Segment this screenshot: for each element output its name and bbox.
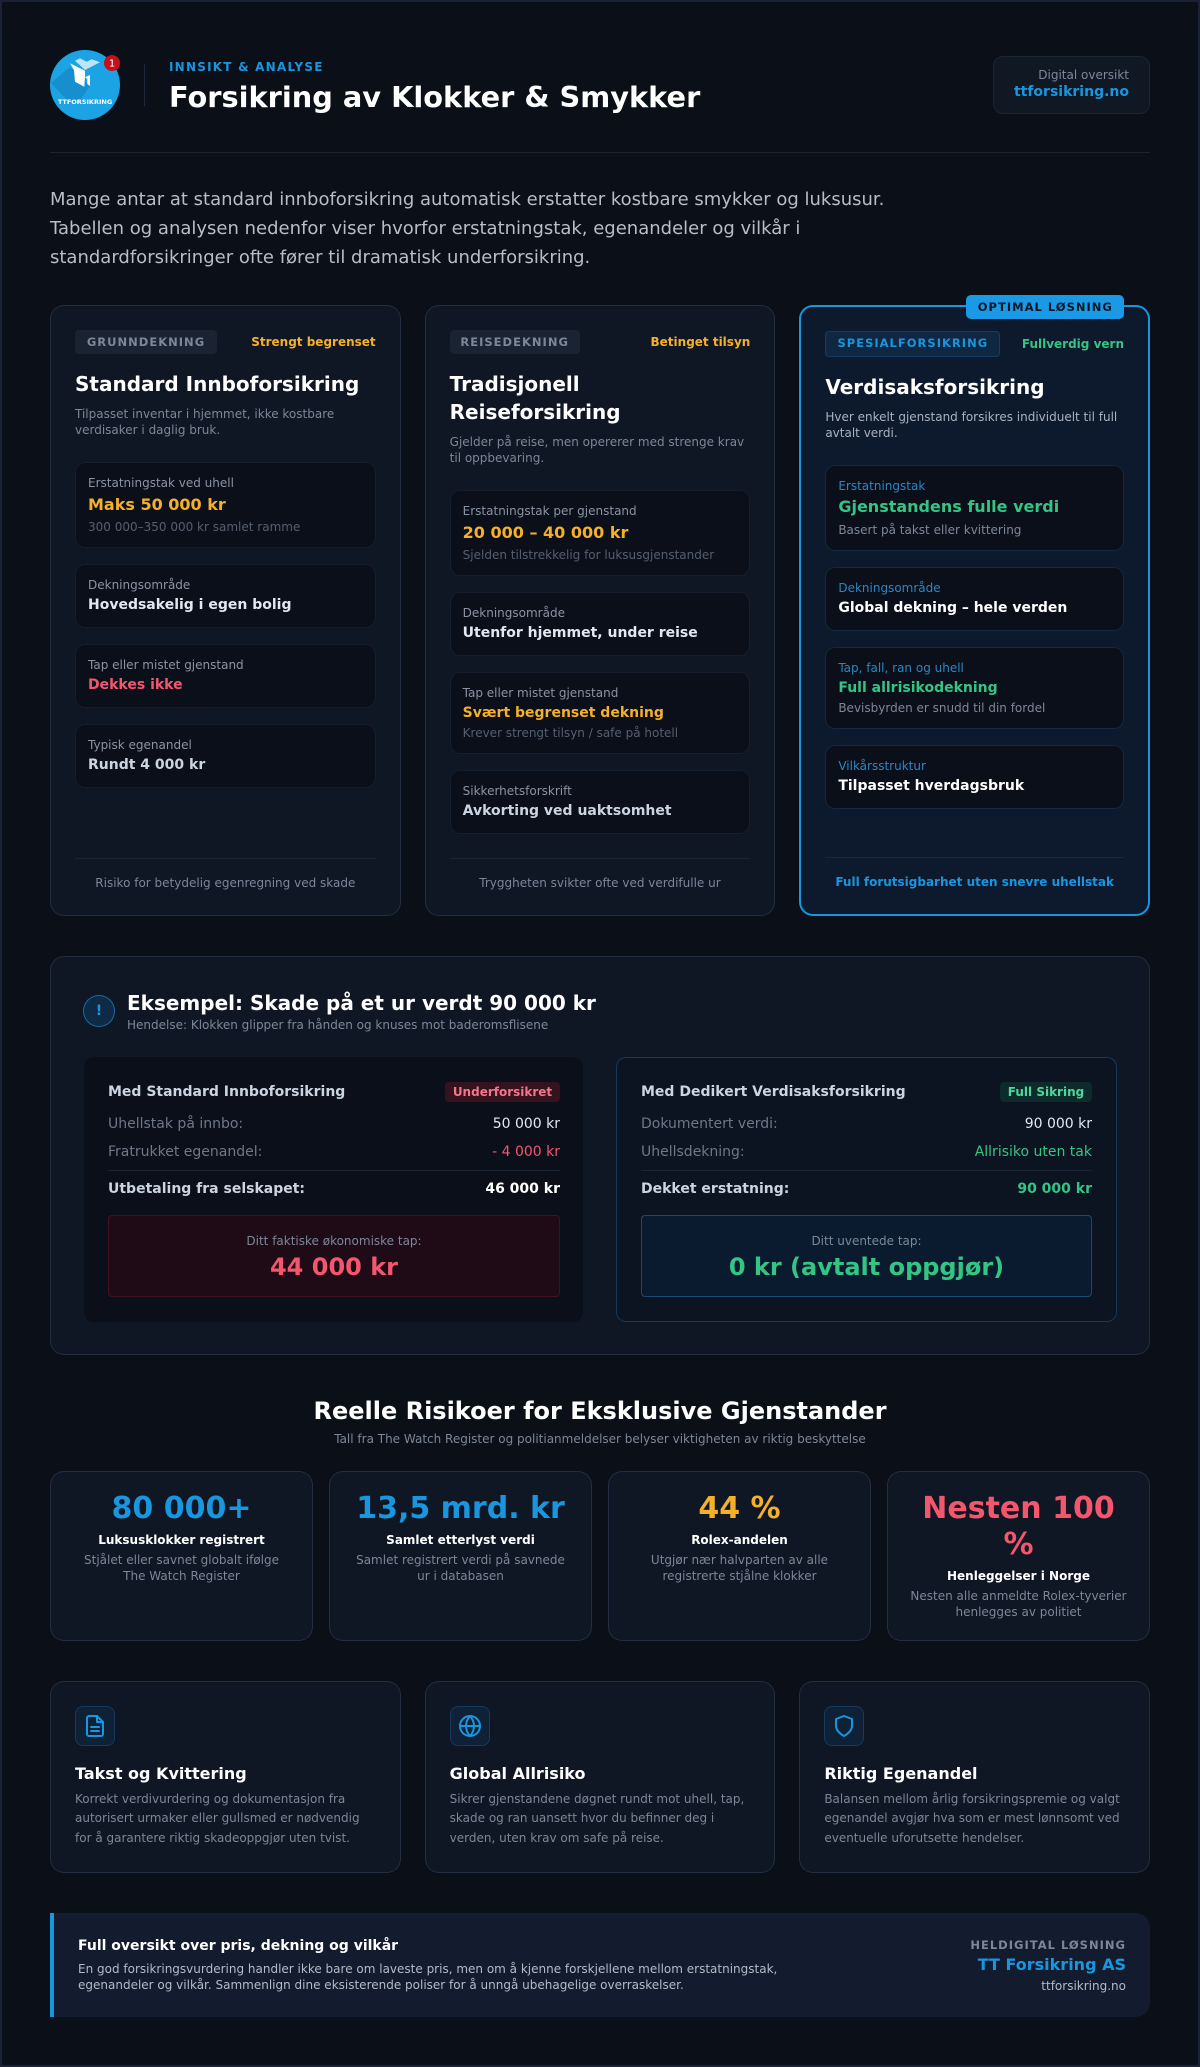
panel: takst og kvittering: Korrekt verdivurdering og dokumentasjon fra: [75, 1792, 345, 1806]
stat: 80 000+: [50, 1471, 313, 1641]
panel: tradisjonell reiseforsikring: Krever strengt tilsyn / safe på hotell: [463, 726, 678, 740]
panel: verdisak calculation: 90 000 kr: [1025, 1116, 1092, 1132]
panel: verdisaksforsikring: Global dekning – hele verden: [838, 600, 1067, 616]
heading: reelle risikoer: Reelle Risikoer for Eksklusive Gjenstander: [313, 1397, 887, 1425]
panel: standard innboforsikring: Tap eller mistet gjenstand: [88, 658, 244, 672]
title: Forsikring av Klokker & Smykker: [169, 80, 700, 114]
panel: standard innboforsikring: 300 000–350 000 kr samlet ramme: [88, 520, 300, 534]
stat: 80 000+: 80 000+: [112, 1491, 251, 1526]
website box: Digital oversikt: [1038, 68, 1129, 82]
callout: loss: [108, 1215, 560, 1297]
panel: standard innboforsikring: Tilpasset inventar i hjemmet, ikke kostbare: [75, 407, 334, 421]
stat: 13,5 mrd: Samlet etterlyst verdi: [386, 1533, 535, 1547]
panel: verdisaksforsikring: Verdisaksforsikring: [825, 375, 1045, 399]
icon: notification badge: 1: [109, 58, 115, 70]
panel: standard innboforsikring: Strengt begrenset: [251, 335, 376, 349]
heading: Eksempel: Skade på et ur verdt 90 000 kr: [127, 991, 596, 1015]
panel: tradisjonell reiseforsikring: Betinget tilsyn: [651, 335, 750, 349]
panel: verdisak calculation: Med Dedikert Verdisaksforsikring: [641, 1084, 906, 1100]
panel: global allrisiko: [425, 1681, 775, 1873]
panel: verdisaksforsikring: Basert på takst eller kvittering: [838, 523, 1021, 537]
stat: 13,5 mrd: Samlet registrert verdi på savnede: [356, 1553, 565, 1567]
panel: verdisak calculation: Uhellsdekning:: [641, 1144, 745, 1160]
callout: no loss: 0 kr (avtalt oppgjør): [729, 1253, 1004, 1281]
panel: global allrisiko: verden, uten krav om safe på reise.: [450, 1830, 664, 1844]
intro text: standardforsikringer ofte fører til dramatisk underforsikring.: [50, 247, 590, 268]
stat: 44 %: Utgjør nær halvparten av alle: [651, 1553, 828, 1567]
panel: riktig egenandel: eventuelle uforutsette hendelser.: [824, 1830, 1024, 1844]
panel: verdisaksforsikring: Hver enkelt gjenstand forsikres individuelt til full: [825, 410, 1117, 424]
panel: tradisjonell reiseforsikring: REISEDEKNING: [460, 335, 569, 349]
stat: 13,5 mrd: [329, 1471, 592, 1641]
website box: [993, 56, 1150, 114]
panel: standard calculation: - 4 000 kr: [492, 1144, 560, 1160]
callout: no loss: [641, 1215, 1092, 1297]
header: [50, 50, 1150, 153]
panel: verdisaksforsikring: Full allrisikodekning: [838, 680, 998, 696]
panel: global allrisiko: Sikrer gjenstandene døgnet rundt mot uhell, tap,: [450, 1792, 744, 1806]
panel: verdisaksforsikring: Fullverdig vern: [1022, 337, 1124, 351]
panel: tradisjonell reiseforsikring: Avkorting ved uaktsomhet: [463, 803, 672, 819]
panel: standard innboforsikring: Maks 50 000 kr: [88, 495, 226, 514]
panel: takst og kvittering: [50, 1681, 401, 1873]
panel: standard calculation: Fratrukket egenandel:: [108, 1144, 262, 1160]
panel: global allrisiko: Global Allrisiko: [450, 1764, 586, 1783]
icon: info circle: [83, 995, 115, 1027]
stat: 44 %: [608, 1471, 871, 1641]
stat: nesten 100 %: %: [1003, 1526, 1034, 1562]
header divider: [144, 64, 145, 106]
panel: verdisaksforsikring: avtalt verdi.: [825, 426, 898, 440]
panel: standard calculation: Uhellstak på innbo:: [108, 1116, 243, 1132]
icon: TT Forsikring logo: [50, 50, 120, 120]
panel: verdisak calculation: [616, 1057, 1117, 1322]
panel: tradisjonell reiseforsikring: Reiseforsikring: [450, 400, 621, 424]
footer panel: ttforsikring.no: [1041, 1979, 1126, 1993]
stat: 80 000+: Stjålet eller savnet globalt ifølge: [84, 1553, 279, 1567]
callout: no loss: Ditt uventede tap:: [811, 1234, 922, 1248]
panel: riktig egenandel: Balansen mellom årlig forsikringspremie og valgt: [824, 1792, 1120, 1806]
footer panel: TT Forsikring AS: [978, 1955, 1126, 1974]
panel: verdisak calculation: Allrisiko uten tak: [975, 1144, 1092, 1160]
panel: tradisjonell reiseforsikring: Erstatningstak per gjenstand: [463, 504, 637, 518]
panel: verdisaksforsikring: Tilpasset hverdagsbruk: [838, 778, 1024, 794]
panel: standard innboforsikring: GRUNNDEKNING: [87, 335, 205, 349]
stat: 80 000+: The Watch Register: [123, 1569, 240, 1583]
panel: tradisjonell reiseforsikring: Svært begrenset dekning: [463, 705, 664, 721]
badge: optimal løsning: [966, 295, 1124, 319]
panel: standard calculation: 46 000 kr: [485, 1181, 560, 1197]
panel: verdisaksforsikring: SPESIALFORSIKRING: [837, 336, 988, 350]
panel: standard innboforsikring: [50, 305, 401, 916]
subheading: Tall fra The Watch Register og politianmeldelser belyser viktigheten av riktig beskyttelse: [334, 1432, 866, 1446]
intro text: [50, 189, 884, 268]
panel: eksempel: [50, 956, 1150, 1355]
panel: verdisaksforsikring: Gjenstandens fulle verdi: [838, 497, 1059, 516]
panel: standard innboforsikring: Hovedsakelig i egen bolig: [88, 597, 291, 613]
panel: verdisaksforsikring: Erstatningstak: [838, 479, 925, 493]
icon: TT Forsikring logo: TTFORSIKRING: [58, 98, 112, 106]
stat: nesten 100 %: Nesten 100: [922, 1491, 1115, 1526]
panel: tradisjonell reiseforsikring: Dekningsområde: [463, 606, 565, 620]
panel: standard innboforsikring: Standard Innboforsikring: [75, 372, 359, 396]
panel: riktig egenandel: egenandel avgjør hva som er mest lønnsomt ved: [824, 1811, 1120, 1825]
panel: standard innboforsikring: Rundt 4 000 kr: [88, 757, 205, 773]
panel: standard calculation: Med Standard Innboforsikring: [108, 1084, 345, 1100]
panel: verdisaksforsikring: Tap, fall, ran og uhell: [838, 661, 964, 675]
panel: verdisak calculation: Dokumentert verdi:: [641, 1116, 778, 1132]
panel: tradisjonell reiseforsikring: Sikkerhetsforskrift: [463, 784, 572, 798]
footer panel: En god forsikringsvurdering handler ikke bare om laveste pris, men om å kjenne forskjellene mellom erstatningstak,: [78, 1962, 777, 1976]
panel: standard innboforsikring: Dekningsområde: [88, 578, 190, 592]
panel: tradisjonell reiseforsikring: til oppbevaring.: [450, 451, 544, 465]
panel: verdisak calculation: 90 000 kr: [1017, 1181, 1092, 1197]
eyebrow: INNSIKT & ANALYSE: [169, 60, 324, 74]
stat: 44 %: Rolex-andelen: [691, 1533, 788, 1547]
stat: nesten 100 %: [887, 1471, 1150, 1641]
panel: tradisjonell reiseforsikring: Tryggheten svikter ofte ved verdifulle ur: [479, 876, 721, 890]
panel: standard calculation: [84, 1057, 583, 1322]
panel: standard innboforsikring: Erstatningstak ved uhell: [88, 476, 234, 490]
panel: tradisjonell reiseforsikring: Gjelder på reise, men opererer med strenge krav: [450, 435, 744, 449]
panel: takst og kvittering: for å garantere riktig skadeoppgjør uten tvist.: [75, 1830, 350, 1844]
stat: nesten 100 %: Nesten alle anmeldte Rolex-tyverier: [910, 1589, 1127, 1603]
panel: tradisjonell reiseforsikring: Tradisjonell: [450, 372, 580, 396]
intro text: Mange antar at standard innboforsikring automatisk erstatter kostbare smykker og luksusur.: [50, 189, 884, 210]
panel: verdisaksforsikring: Bevisbyrden er snudd til din fordel: [838, 701, 1045, 715]
panel: tradisjonell reiseforsikring: 20 000 – 40 000 kr: [463, 523, 628, 542]
panel: tradisjonell reiseforsikring: Tap eller mistet gjenstand: [463, 686, 618, 700]
stat: nesten 100 %: Henleggelser i Norge: [947, 1569, 1090, 1583]
panel: standard innboforsikring: Risiko for betydelig egenregning ved skade: [95, 876, 355, 890]
panel: tradisjonell reiseforsikring: [425, 305, 775, 916]
footer panel: [50, 1913, 1150, 2017]
callout: loss: 44 000 kr: [270, 1253, 398, 1281]
panel: verdisaksforsikring: Dekningsområde: [838, 581, 941, 595]
stat: 13,5 mrd: 13,5 mrd. kr: [356, 1491, 565, 1526]
panel: riktig egenandel: [799, 1681, 1150, 1873]
icon: shield: [824, 1706, 864, 1746]
footer panel: egenandeler og vilkår. Sammenlign dine eksisterende poliser for å unngå ubehagelige overraskelser.: [78, 1978, 684, 1992]
panel: verdisaksforsikring: Vilkårsstruktur: [838, 759, 926, 773]
panel: tradisjonell reiseforsikring: Sjelden tilstrekkelig for luksusgjenstander: [463, 548, 714, 562]
panel: verdisak calculation: Full Sikring: [1008, 1085, 1084, 1099]
panel: takst og kvittering: Takst og Kvittering: [75, 1764, 247, 1783]
panel: global allrisiko: skade og ran uansett hvor du befinner deg i: [450, 1811, 714, 1825]
panel: standard innboforsikring: Typisk egenandel: [88, 738, 192, 752]
intro text: Tabellen og analysen nedenfor viser hvorfor erstatningstak, egenandeler og vilkår i: [50, 218, 800, 239]
stat: 44 %: registrerte stjålne klokker: [662, 1569, 817, 1583]
website box: ttforsikring.no: [1014, 84, 1129, 100]
panel: riktig egenandel: Riktig Egenandel: [824, 1764, 978, 1783]
panel: tradisjonell reiseforsikring: Utenfor hjemmet, under reise: [463, 625, 698, 641]
panel: standard calculation: Utbetaling fra selskapet:: [108, 1181, 305, 1197]
panel: takst og kvittering: autorisert urmaker eller gullsmed er nødvendig: [75, 1811, 360, 1825]
footer panel: HELDIGITAL LØSNING: [970, 1938, 1126, 1952]
panel: standard calculation: 50 000 kr: [493, 1116, 560, 1132]
panel: eksempel: Hendelse: Klokken glipper fra hånden og knuses mot baderomsflisene: [127, 1018, 548, 1032]
stat: 44 %: 44 %: [698, 1491, 781, 1526]
callout: loss: Ditt faktiske økonomiske tap:: [246, 1234, 422, 1248]
stat: 80 000+: Luksusklokker registrert: [98, 1533, 265, 1547]
panel: standard innboforsikring: Dekkes ikke: [88, 677, 183, 693]
badge: optimal løsning: OPTIMAL LØSNING: [978, 300, 1113, 314]
panel: standard calculation: Underforsikret: [453, 1085, 552, 1099]
panel: verdisaksforsikring: [799, 305, 1150, 916]
panel: verdisaksforsikring: Full forutsigbarhet uten snevre uhellstak: [835, 875, 1114, 889]
stat: nesten 100 %: henlegges av politiet: [955, 1605, 1082, 1619]
icon: info circle: !: [96, 1003, 102, 1019]
stat: 13,5 mrd: ur i databasen: [417, 1569, 504, 1583]
panel: standard innboforsikring: verdisaker i daglig bruk.: [75, 423, 220, 437]
icon: globe: [450, 1706, 490, 1746]
footer panel: Full oversikt over pris, dekning og vilkår: [78, 1938, 398, 1954]
icon: document: [75, 1706, 115, 1746]
panel: verdisak calculation: Dekket erstatning:: [641, 1181, 789, 1197]
